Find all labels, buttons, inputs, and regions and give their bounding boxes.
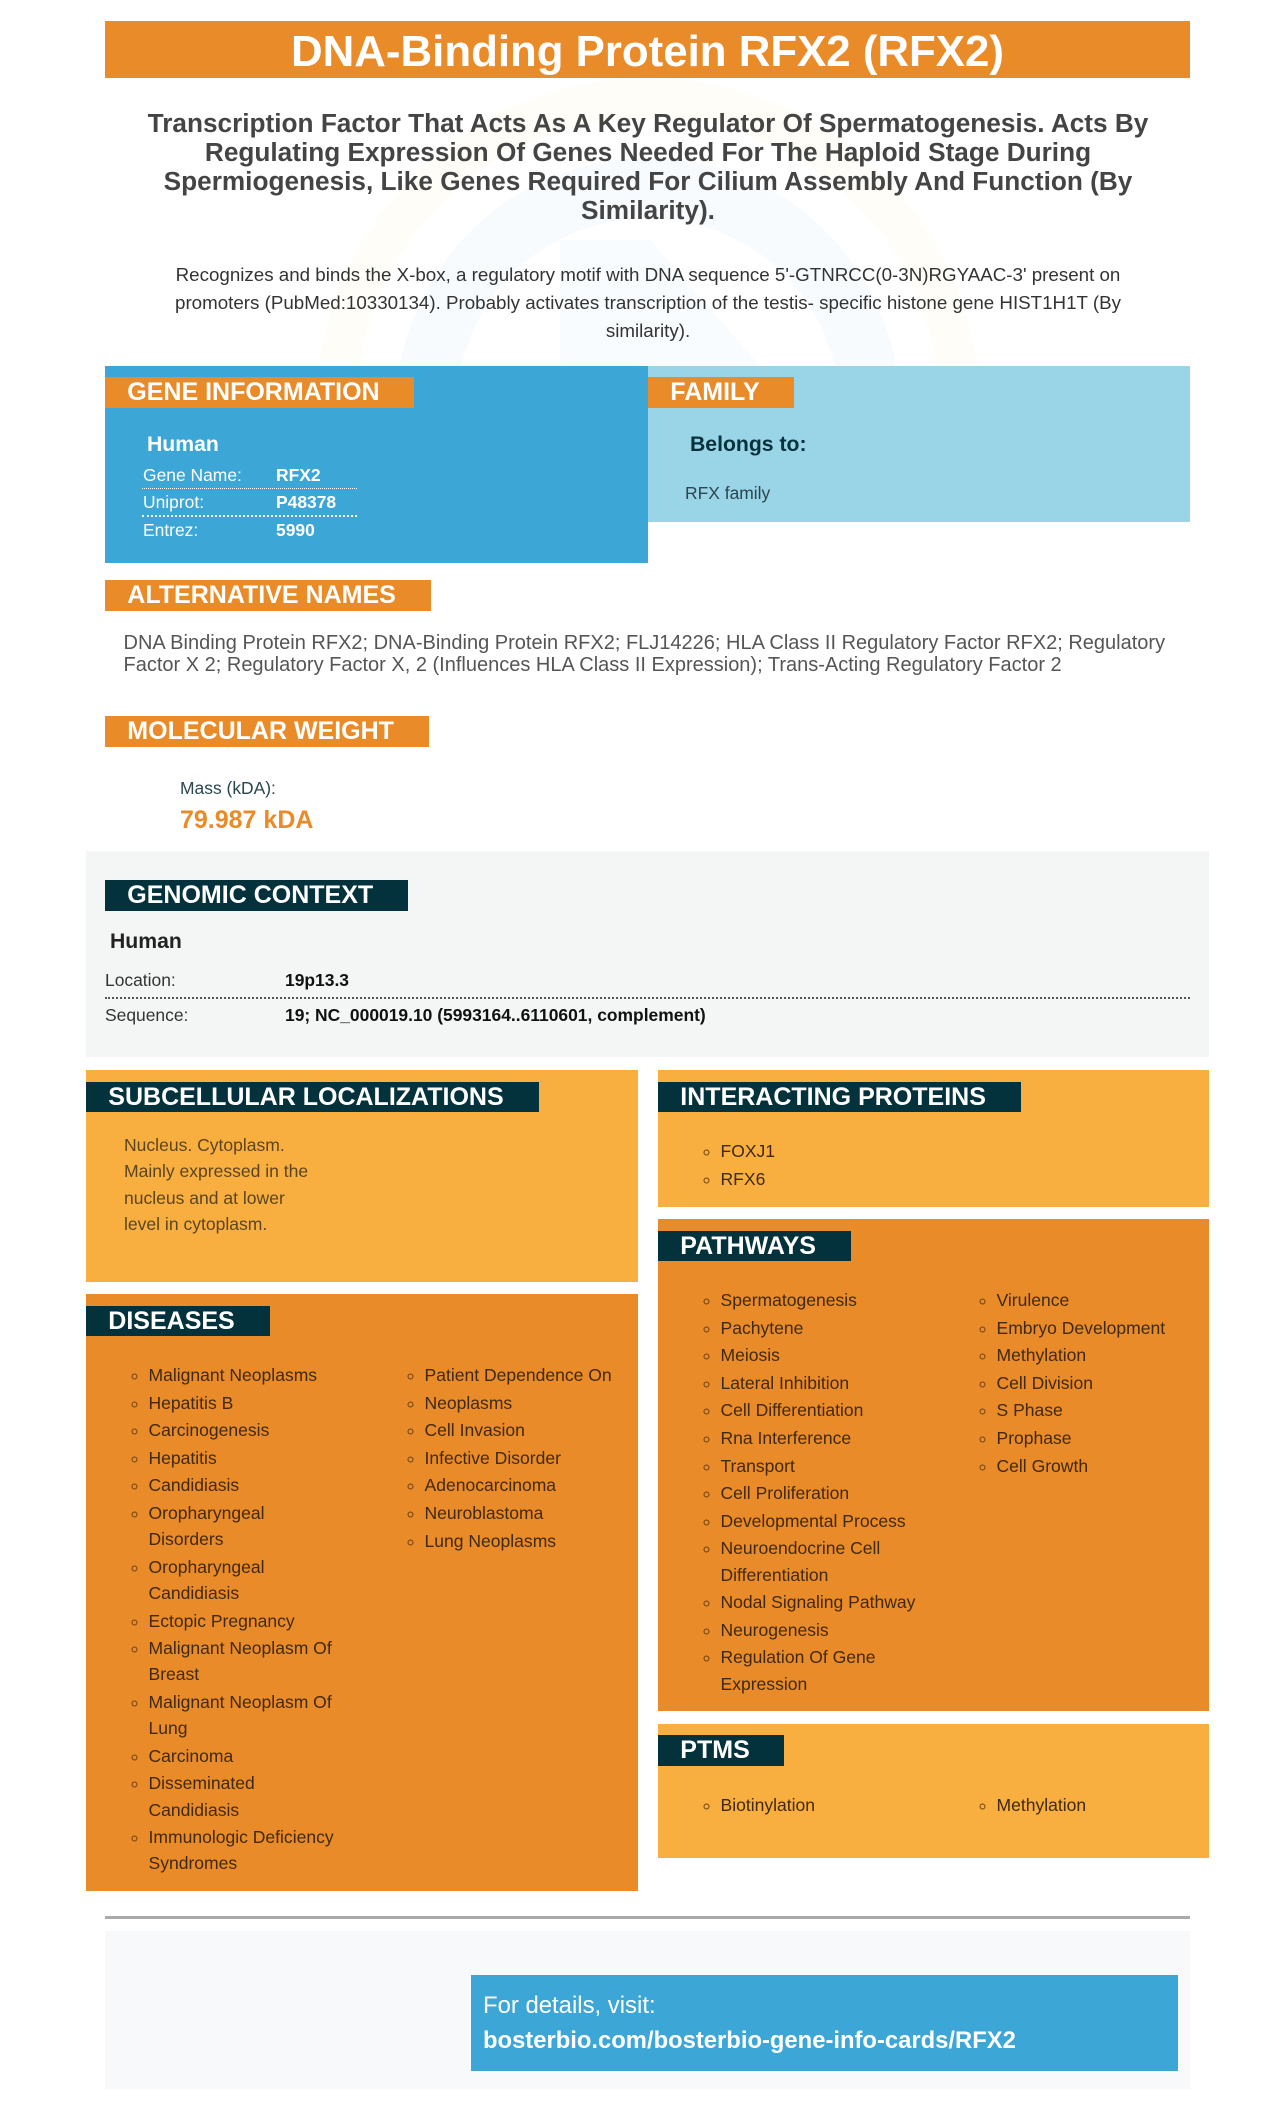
alternative names text: Factor X 2; Regulatory Factor X, 2 (Influences HLA Class II Expression); Trans-Acting Regulatory Factor 2: [124, 654, 1062, 676]
list: diseases column 1: [132, 1365, 334, 1873]
sequence row: 19; NC_000019.10 (5993164..6110601, complement): [285, 1005, 706, 1025]
heading: ptms: [658, 1735, 784, 1766]
heading: family: [648, 377, 794, 408]
description paragraph: promoters (PubMed:10330134). Probably activates transcription of the testis- specific histone gene HIST1H1T (By: [175, 292, 1121, 313]
gene table: [142, 465, 357, 540]
footer panel: [105, 1931, 1190, 2089]
localization text: Nucleus. Cytoplasm.: [124, 1135, 285, 1155]
visit url: bosterbio.com/bosterbio-gene-info-cards/RFX2: [483, 2027, 1016, 2054]
list: pathways column 1: [704, 1290, 916, 1694]
panel: ptms: [658, 1724, 1209, 1858]
list: pathways column 2: Virulence: [996, 1290, 1069, 1310]
localization text: nucleus and at lower: [124, 1188, 285, 1208]
localization text: Mainly expressed in the: [124, 1161, 308, 1181]
list: diseases column 1: Immunologic Deficiency: [148, 1827, 334, 1847]
list: pathways column 1: Differentiation: [720, 1565, 828, 1585]
list: diseases column 2: Neoplasms: [424, 1393, 512, 1413]
heading: ptms: PTMS: [680, 1736, 750, 1764]
list: ptms column 2: Methylation: [996, 1795, 1086, 1815]
title banner: DNA-Binding Protein RFX2 (RFX2): [291, 27, 1004, 76]
list: pathways column 1: Neuroendocrine Cell: [720, 1538, 880, 1558]
species label: Human: [110, 930, 182, 953]
list: diseases column 1: Carcinogenesis: [148, 1420, 269, 1440]
mass label: Mass (kDA):: [180, 778, 276, 798]
panel: pathways: [658, 1219, 1209, 1711]
localization text: level in cytoplasm.: [124, 1214, 267, 1234]
list: pathways column 2: Cell Division: [996, 1373, 1093, 1393]
description paragraph: [175, 264, 1121, 341]
list: pathways column 1: Transport: [720, 1456, 795, 1476]
panel: interacting proteins: [658, 1070, 1209, 1207]
list: pathways column 1: Pachytene: [720, 1318, 803, 1338]
list: pathways column 2: Methylation: [996, 1345, 1086, 1365]
location row: 19p13.3: [285, 970, 349, 990]
heading: molecular weight: MOLECULAR WEIGHT: [127, 717, 394, 745]
description paragraph: similarity).: [606, 320, 690, 341]
list: interacting proteins: [704, 1141, 775, 1189]
list: diseases column 1: Oropharyngeal: [148, 1557, 264, 1577]
sequence row: [105, 997, 1190, 1029]
panel: diseases: [86, 1294, 638, 1891]
list: pathways column 1: Developmental Process: [720, 1511, 906, 1531]
mass value: 79.987 kDA: [180, 806, 313, 834]
list: diseases column 1: Syndromes: [148, 1853, 237, 1873]
list: diseases column 2: Infective Disorder: [424, 1448, 561, 1468]
heading: pathways: [658, 1231, 851, 1261]
panel: genomic context: [86, 851, 1209, 1057]
panel: family: [648, 366, 1190, 522]
visit label: For details, visit:: [483, 1992, 656, 2019]
sequence row: Sequence:: [105, 1005, 188, 1025]
heading: alternative names: ALTERNATIVE NAMES: [127, 581, 396, 609]
list: pathways column 1: Nodal Signaling Pathway: [720, 1592, 915, 1612]
gene table: 5990: [276, 520, 315, 540]
location row: [105, 970, 349, 990]
list: diseases column 2: Patient Dependence On: [424, 1365, 612, 1385]
species label: Human: [147, 432, 219, 456]
list: diseases column 2: Cell Invasion: [424, 1420, 525, 1440]
subtitle heading: Regulating Expression Of Genes Needed For The Haploid Stage During: [205, 137, 1091, 167]
list: pathways column 1: Spermatogenesis: [720, 1290, 857, 1310]
list: diseases column 2: Neuroblastoma: [424, 1503, 543, 1523]
list: diseases column 1: Ectopic Pregnancy: [148, 1611, 295, 1631]
list: pathways column 1: Regulation Of Gene: [720, 1647, 875, 1667]
heading: gene information: GENE INFORMATION: [127, 378, 380, 406]
list: pathways column 2: [980, 1290, 1165, 1476]
heading: pathways: PATHWAYS: [680, 1232, 816, 1260]
list: pathways column 1: Neurogenesis: [720, 1620, 829, 1640]
subtitle heading: Transcription Factor That Acts As A Key Regulator Of Spermatogenesis. Acts By: [148, 108, 1148, 138]
gene table: Entrez:: [143, 520, 198, 540]
gene table: RFX2: [276, 465, 321, 485]
list: pathways column 1: Rna Interference: [720, 1428, 851, 1448]
list: diseases column 1: Hepatitis: [148, 1448, 217, 1468]
list: ptms column 1: Biotinylation: [720, 1795, 815, 1815]
list: diseases column 1: Disorders: [148, 1529, 224, 1549]
list: diseases column 1: Malignant Neoplasm Of: [148, 1692, 332, 1712]
list: diseases column 1: Hepatitis B: [148, 1393, 233, 1413]
list: pathways column 1: Lateral Inhibition: [720, 1373, 849, 1393]
list: pathways column 1: Cell Proliferation: [720, 1483, 849, 1503]
list: pathways column 1: Expression: [720, 1674, 807, 1694]
list: pathways column 2: Embryo Development: [996, 1318, 1165, 1338]
alternative names text: DNA Binding Protein RFX2; DNA-Binding Protein RFX2; FLJ14226; HLA Class II Regulatory Factor RFX2; Regulatory: [124, 632, 1165, 654]
belongs to label: Belongs to:: [690, 432, 807, 456]
list: diseases column 1: Disseminated: [148, 1773, 255, 1793]
title banner: [105, 21, 1190, 78]
list: pathways column 1: Meiosis: [720, 1345, 780, 1365]
callout: details link: [471, 1975, 1178, 2071]
description paragraph: Recognizes and binds the X-box, a regulatory motif with DNA sequence 5'-GTNRCC(0-3N)RGYAAC-3' present on: [176, 264, 1120, 285]
heading: diseases: [86, 1306, 270, 1336]
heading: interacting proteins: INTERACTING PROTEINS: [680, 1083, 986, 1111]
location row: Location:: [105, 970, 176, 990]
background watermark logo: [0, 0, 1288, 400]
list: pathways column 2: Prophase: [996, 1428, 1072, 1448]
heading: family: FAMILY: [670, 378, 760, 406]
list: diseases column 2: Adenocarcinoma: [424, 1475, 556, 1495]
list: pathways column 2: Cell Growth: [996, 1456, 1088, 1476]
list: diseases column 1: Malignant Neoplasms: [148, 1365, 317, 1385]
list: diseases column 1: Candidiasis: [148, 1800, 239, 1820]
list: diseases column 1: Malignant Neoplasm Of: [148, 1638, 332, 1658]
heading: genomic context: GENOMIC CONTEXT: [127, 881, 373, 909]
family value: RFX family: [685, 483, 770, 503]
list: diseases column 1: Carcinoma: [148, 1746, 233, 1766]
list: diseases column 1: Candidiasis: [148, 1583, 239, 1603]
list: diseases column 2: Lung Neoplasms: [424, 1531, 556, 1551]
list: diseases column 1: Lung: [148, 1718, 188, 1738]
list: diseases column 1: Breast: [148, 1664, 199, 1684]
heading: subcellular localizations: SUBCELLULAR LOCALIZATIONS: [108, 1083, 504, 1111]
list: diseases column 2: [408, 1365, 612, 1551]
list: interacting proteins: RFX6: [720, 1169, 765, 1189]
localization text: [124, 1135, 308, 1234]
heading: diseases: DISEASES: [108, 1307, 235, 1335]
gene table: Gene Name:: [143, 465, 242, 485]
subtitle heading: Spermiogenesis, Like Genes Required For Cilium Assembly And Function (By: [164, 166, 1132, 196]
gene table: P48378: [276, 492, 336, 512]
panel: gene information: [105, 366, 648, 563]
list: pathways column 2: S Phase: [996, 1400, 1063, 1420]
subtitle heading: [148, 108, 1148, 225]
list: pathways column 1: Cell Differentiation: [720, 1400, 863, 1420]
list: interacting proteins: FOXJ1: [720, 1141, 775, 1161]
alternative names text: [124, 632, 1165, 676]
subtitle heading: Similarity).: [581, 195, 715, 225]
list: diseases column 1: Candidiasis: [148, 1475, 239, 1495]
gene table: Uniprot:: [143, 492, 204, 512]
list: diseases column 1: Oropharyngeal: [148, 1503, 264, 1523]
panel: subcellular localizations: [86, 1070, 638, 1282]
